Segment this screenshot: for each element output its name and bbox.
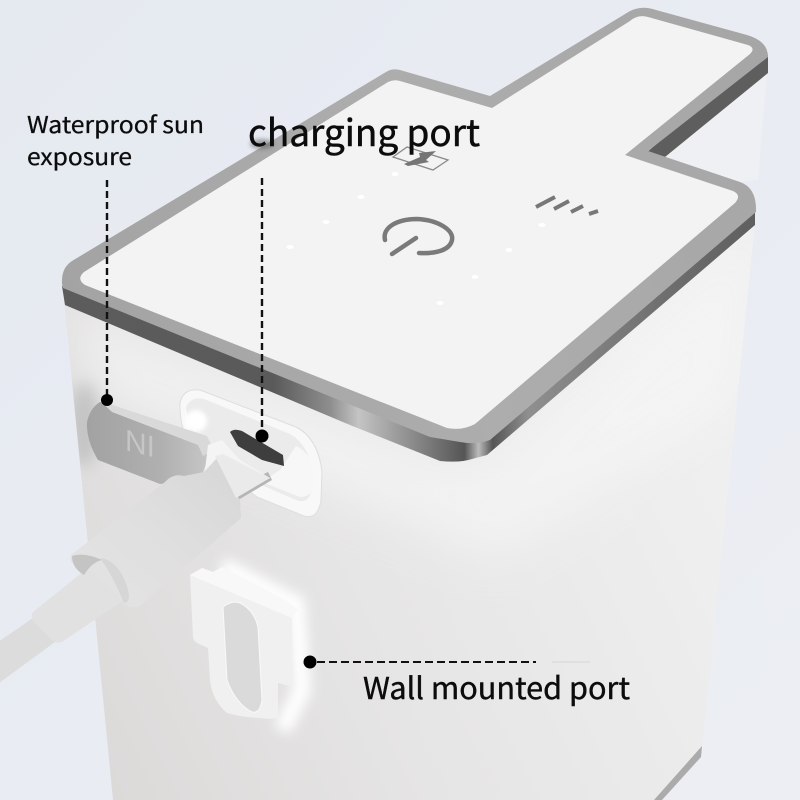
- connector top plate: [205, 440, 270, 498]
- chrome underside of rim: [62, 205, 755, 462]
- strain relief: [32, 558, 124, 643]
- charging port recess: [180, 390, 322, 517]
- battery level bars: [536, 197, 598, 214]
- power button icon: [385, 219, 452, 254]
- USB-C cable: [0, 440, 272, 686]
- cable cord: [0, 618, 55, 686]
- bracket top edge: [190, 567, 298, 618]
- battery lightning icon: [393, 147, 448, 170]
- back section of body: [660, 72, 767, 182]
- wall mount bracket: [190, 567, 298, 719]
- callout: waterproof cover: [27, 106, 204, 406]
- port highlight: [185, 410, 207, 432]
- callout: charging port: charging port: [248, 103, 480, 157]
- light wash below rim: [82, 325, 542, 524]
- USB socket: [230, 430, 284, 466]
- label: waterproof sun exposure: Waterproof sun: [27, 106, 204, 140]
- main body faces: [64, 222, 755, 800]
- wall mount glow: [222, 566, 302, 730]
- callout: waterproof cover: exposure: [27, 138, 132, 172]
- shadow around cover: [68, 383, 100, 467]
- mounting slot: [223, 602, 262, 712]
- overmold end cap: [72, 555, 102, 575]
- top panel: [80, 16, 753, 429]
- smudge on rim: [250, 139, 274, 149]
- callout: wall mounted port: Wall mounted port: [363, 664, 630, 708]
- waterproof cover: [87, 401, 214, 484]
- top rim: [62, 8, 768, 443]
- bottom edge trim: [654, 746, 702, 800]
- embossed NI mark: NI: [125, 423, 155, 464]
- callout: charging port: [248, 103, 480, 442]
- dark underside of tab rim: [646, 55, 768, 157]
- indicator light dots: [286, 172, 546, 305]
- connector overmold: [70, 458, 241, 607]
- callout: wall mounted port: [304, 656, 630, 708]
- connector metal tip: [226, 472, 272, 503]
